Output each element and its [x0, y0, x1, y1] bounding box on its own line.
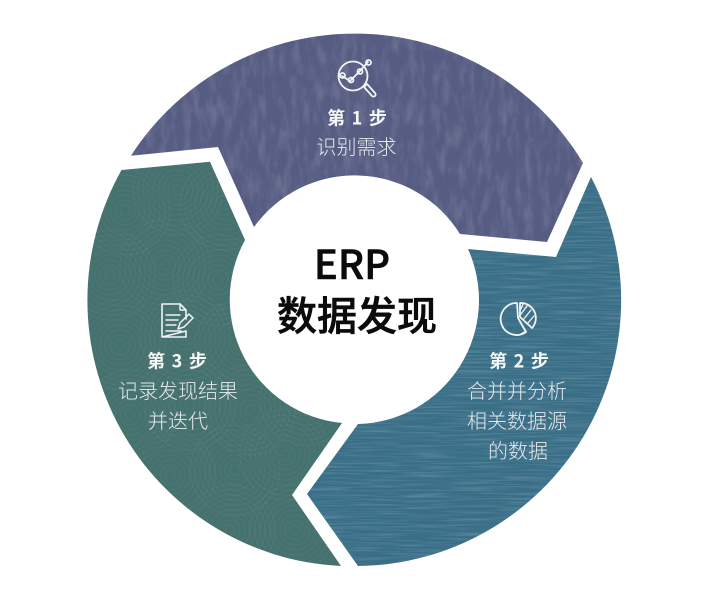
icon: magnifier with line chart [338, 60, 376, 97]
text: step 3 [118, 348, 238, 434]
text: step 3: 第 3 步 [147, 348, 207, 374]
title: ERP [314, 233, 390, 291]
text: step 2: 的数据 [488, 435, 548, 464]
text: step 3: 并迭代 [148, 405, 208, 434]
text: step 1: 识别需求 [316, 131, 396, 160]
panel: step 2 segment [300, 170, 625, 570]
text: step 3: 记录发现结果 [118, 375, 238, 404]
title [277, 233, 437, 342]
panel: step 1 segment [120, 30, 590, 245]
title: 数据发现 [277, 284, 437, 342]
text: step 2: 相关数据源 [467, 405, 567, 434]
text: step 1: 第 1 步 [327, 104, 387, 130]
text: step 1 [316, 104, 396, 160]
icon: pie chart [501, 303, 536, 335]
text: step 2: 第 2 步 [489, 348, 549, 374]
cycle diagram [87, 34, 622, 566]
panel: step 3 segment [87, 162, 342, 566]
icon: document and pencil [162, 304, 193, 337]
text: step 2: 合并并分析 [467, 375, 567, 404]
text: step 2 [467, 348, 567, 464]
